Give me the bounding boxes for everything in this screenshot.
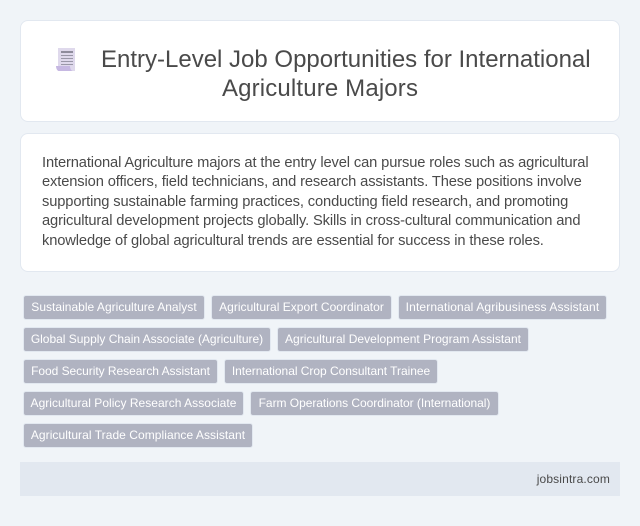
footer text: jobsintra.com — [537, 472, 610, 486]
text block: description: International Agriculture majors at the entry level can pursue roles such as agricultural — [42, 155, 588, 171]
tag: Agricultural Trade Compliance Assistant — [31, 428, 245, 442]
tag: Farm Operations Coordinator (International) — [259, 396, 490, 410]
panel: description — [20, 133, 620, 272]
title: Entry-Level Job Opportunities for International — [101, 46, 591, 73]
tag list — [23, 295, 607, 448]
tag: Sustainable Agriculture Analyst — [31, 300, 197, 314]
text block: description: extension officers, field technicians, and research assistants. These positions involve — [42, 174, 582, 190]
text block: description — [42, 155, 588, 249]
tag: Agricultural Export Coordinator — [219, 300, 384, 314]
text block: description: supporting sustainable farming practices, conducting field research, and promoting — [42, 194, 568, 210]
title — [101, 46, 591, 102]
tag — [23, 391, 244, 416]
tag: International Agribusiness Assistant — [406, 300, 599, 314]
title: Agriculture Majors — [222, 75, 418, 102]
tag — [23, 423, 253, 448]
tag: Agricultural Policy Research Associate — [31, 396, 236, 410]
text block: description: agricultural development projects globally. Skills in cross-cultural communication and — [42, 213, 580, 229]
tag — [23, 295, 205, 320]
panel: title card — [20, 20, 620, 122]
tag: International Crop Consultant Trainee — [232, 364, 430, 378]
tag — [250, 391, 499, 416]
footer bar — [20, 462, 620, 496]
tag: Food Security Research Assistant — [31, 364, 210, 378]
tag — [398, 295, 607, 320]
text block: description: knowledge of global agricultural trends are essential for success in these roles. — [42, 233, 544, 249]
tag — [277, 327, 529, 352]
tag — [23, 327, 271, 352]
tag: Global Supply Chain Associate (Agriculture) — [31, 332, 263, 346]
tag — [211, 295, 392, 320]
tag — [23, 359, 218, 384]
icon: document scroll — [56, 48, 75, 71]
tag: Agricultural Development Program Assistant — [285, 332, 521, 346]
tag — [224, 359, 438, 384]
